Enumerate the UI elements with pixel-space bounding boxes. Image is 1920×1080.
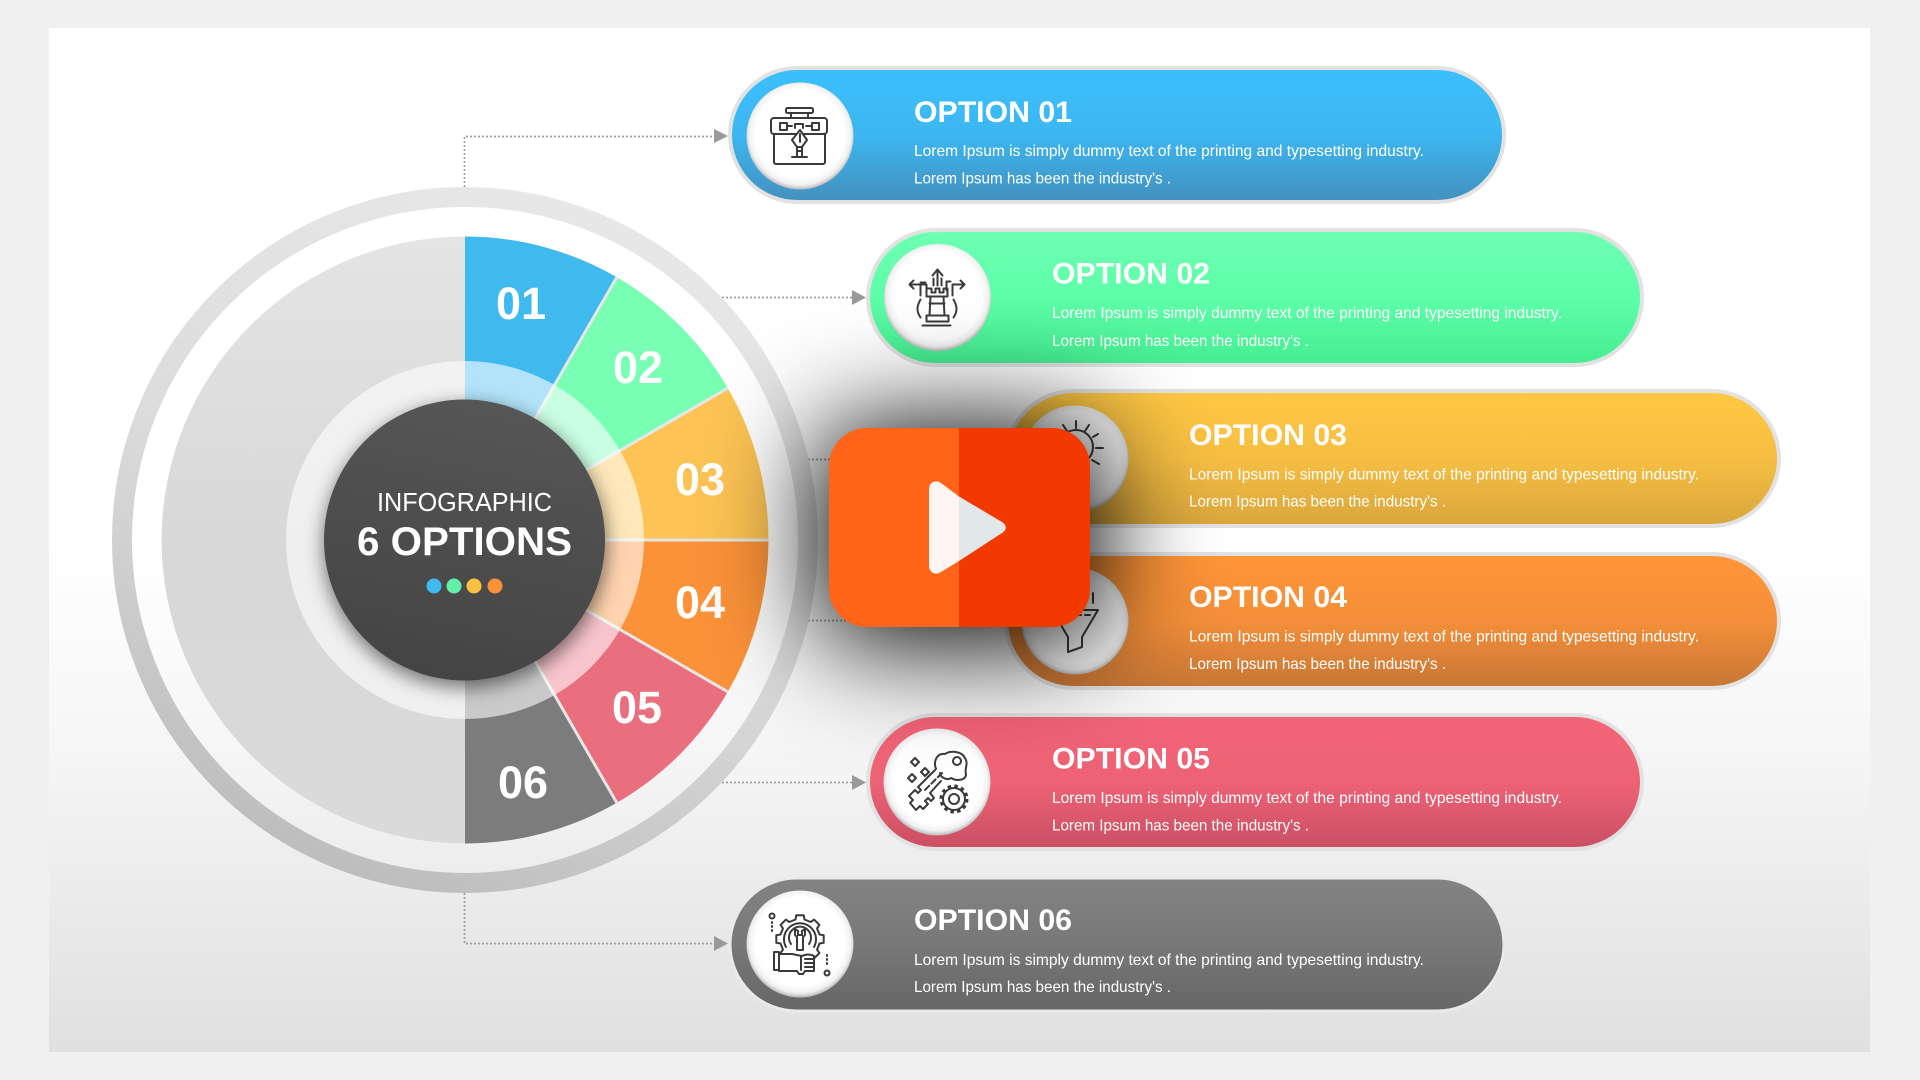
number 06: 06: [498, 757, 548, 808]
icon: gear, wrench and hand: [770, 914, 830, 976]
icon: chess rook with arrows: [910, 270, 964, 326]
donut chart: [122, 197, 808, 883]
slice 05: [465, 540, 728, 803]
option 01 description: [914, 143, 1424, 188]
option 05 description: [1052, 790, 1562, 834]
number 04: 04: [675, 577, 725, 628]
connector: option 03: [808, 452, 1004, 467]
center hub: [323, 400, 607, 688]
outer ring: [122, 197, 808, 883]
hub title: 6 OPTIONS: [357, 520, 572, 564]
option 04 description: Lorem Ipsum has been the industry's .: [1189, 656, 1446, 673]
number 03: 03: [675, 454, 725, 505]
option 03 description: [1189, 466, 1699, 510]
icon: key and gear: [908, 752, 967, 812]
icon: toolbox with pen nib: [771, 108, 827, 164]
option 06 title: OPTION 06: [914, 904, 1072, 937]
connector: option 05: [722, 775, 866, 790]
option 03 description: Lorem Ipsum is simply dummy text of the printing and typesetting industry.: [1189, 466, 1699, 484]
slice 06: [465, 540, 617, 844]
option 01 description: Lorem Ipsum is simply dummy text of the printing and typesetting industry.: [914, 143, 1424, 160]
slice 01: [465, 236, 617, 540]
connector: option 04: [808, 613, 1004, 628]
option 06 description: Lorem Ipsum has been the industry's .: [914, 979, 1171, 996]
option 06 description: [914, 952, 1424, 996]
option 04 description: Lorem Ipsum is simply dummy text of the printing and typesetting industry.: [1189, 628, 1699, 646]
panel: option 02: [868, 230, 1642, 365]
option 05 description: Lorem Ipsum is simply dummy text of the printing and typesetting industry.: [1052, 790, 1562, 807]
left half disc: [162, 236, 465, 844]
panel: option 05: [868, 715, 1642, 849]
option 02 description: Lorem Ipsum has been the industry's .: [1052, 333, 1309, 350]
panel: option 03: [1006, 391, 1779, 526]
panel: option 04: [1006, 554, 1779, 688]
color dots: [426, 578, 502, 594]
option 02 title: OPTION 02: [1052, 258, 1210, 290]
connector: option 06: [464, 893, 728, 951]
slice 04: [465, 540, 768, 692]
option 02 description: [1052, 305, 1562, 350]
number 01: 01: [496, 278, 546, 329]
icon: video play button: [819, 425, 1100, 644]
hub label: INFOGRAPHIC: [377, 487, 552, 517]
option 05 title: OPTION 05: [1052, 742, 1210, 776]
icon: light bulb: [1049, 421, 1103, 473]
option 01 title: OPTION 01: [914, 96, 1072, 129]
option 03 title: OPTION 03: [1189, 419, 1347, 452]
option 04 description: [1189, 628, 1699, 673]
slice 03: [465, 388, 768, 540]
option 01 description: Lorem Ipsum has been the industry's .: [914, 170, 1171, 188]
option 05 description: Lorem Ipsum has been the industry's .: [1052, 818, 1309, 834]
number 05: 05: [612, 682, 662, 733]
panel: option 06: [730, 878, 1504, 1011]
number 02: 02: [613, 342, 663, 393]
option 04 title: OPTION 04: [1189, 581, 1347, 614]
option 06 description: Lorem Ipsum is simply dummy text of the printing and typesetting industry.: [914, 952, 1424, 969]
icon: funnel: [1052, 593, 1098, 652]
option 03 description: Lorem Ipsum has been the industry's .: [1189, 494, 1446, 510]
connector: option 02: [722, 290, 866, 305]
panel: option 01: [730, 68, 1504, 202]
connector: option 01: [464, 129, 728, 187]
option 02 description: Lorem Ipsum is simply dummy text of the printing and typesetting industry.: [1052, 305, 1562, 322]
translucent inner ring: [286, 361, 644, 719]
slice 02: [465, 277, 728, 540]
